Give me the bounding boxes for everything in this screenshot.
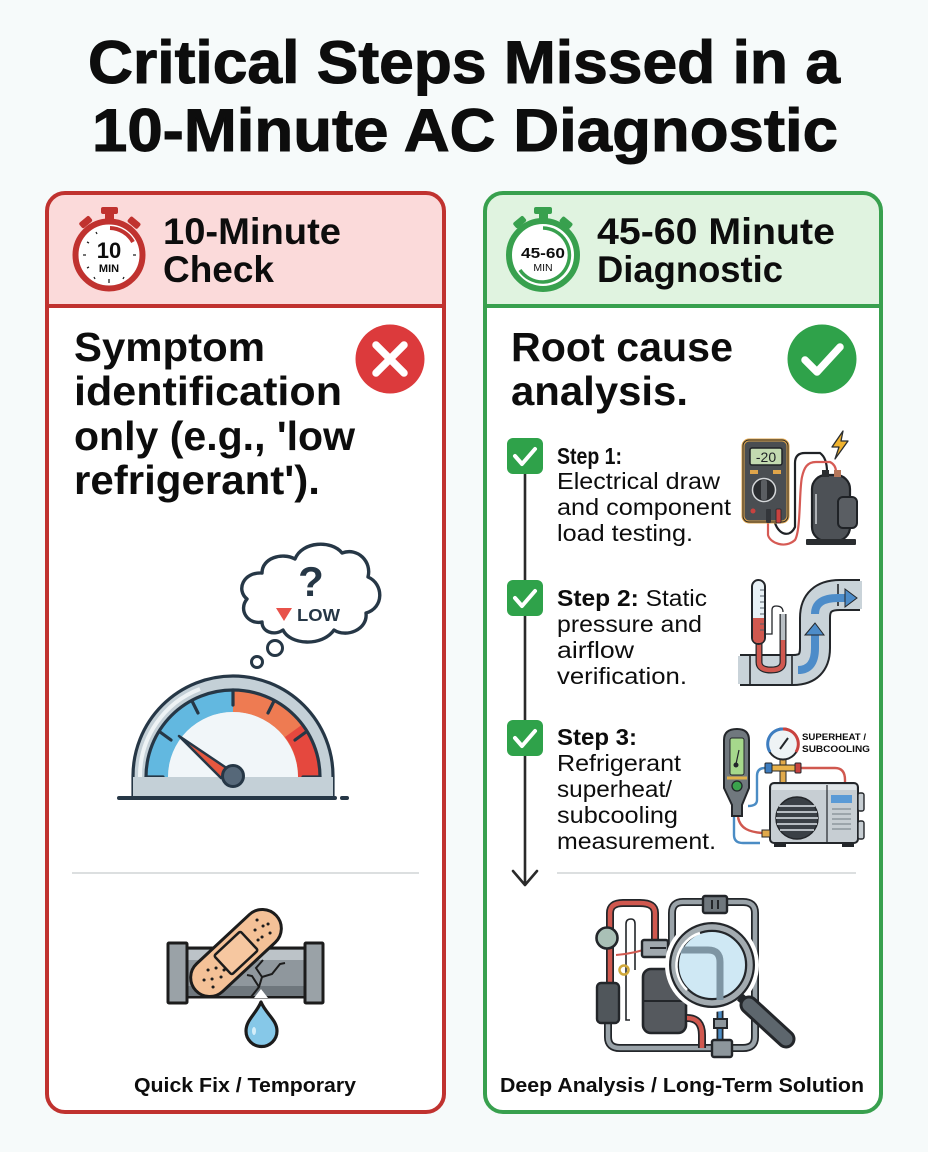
step 1 text	[557, 443, 731, 546]
step 1 text: Step 1:	[557, 443, 622, 469]
heading: 45-60 minute diagnostic	[597, 211, 835, 290]
icon: multimeter and compressor: -20	[756, 449, 776, 465]
step 1 text: load testing.	[557, 520, 693, 546]
step 3 text: superheat/	[557, 776, 672, 802]
step 2 text: pressure and	[557, 611, 702, 637]
heading: 10-minute check	[163, 211, 341, 290]
text: symptom identification: identification	[74, 368, 342, 414]
step 2 text: verification.	[557, 663, 687, 689]
icon: red x badge	[356, 324, 424, 394]
icon: pressure gauge	[119, 676, 347, 798]
step 2 text	[557, 585, 707, 689]
text: symptom identification: only (e.g., 'low	[74, 413, 355, 459]
text: symptom identification: refrigerant').	[74, 457, 320, 503]
heading: 10-minute check: Check	[163, 249, 274, 290]
icon: manometer and duct	[738, 580, 862, 685]
step 3 text	[557, 724, 716, 854]
timeline arrow	[513, 474, 537, 885]
text: root cause analysis	[511, 324, 733, 414]
step 2 text: airflow	[557, 637, 635, 663]
title	[88, 29, 841, 164]
step 3 text: subcooling	[557, 802, 678, 828]
icon: red stopwatch	[76, 207, 142, 288]
icon: green check badge	[788, 324, 856, 394]
heading: 45-60 minute diagnostic: 45-60 Minute	[597, 211, 835, 252]
step 3 check	[507, 720, 543, 756]
step 3 text: measurement.	[557, 828, 716, 854]
icon: red stopwatch: MIN	[99, 263, 119, 275]
icon: magnifier over AC system	[596, 896, 786, 1057]
icon: thought cloud	[242, 544, 380, 668]
icon: thought cloud: ?	[298, 558, 324, 605]
icon: refrigerant gauges and outdoor unit	[724, 728, 870, 847]
text: root cause analysis: Root cause	[511, 324, 733, 370]
icon: refrigerant gauges and outdoor unit: SUPERHEAT /	[802, 732, 867, 742]
icon: refrigerant gauges and outdoor unit: SUBCOOLING	[802, 744, 870, 754]
icon: green stopwatch	[509, 207, 577, 289]
caption: deep analysis: Deep Analysis / Long-Term Solution	[500, 1075, 864, 1097]
icon: bandaged cracked pipe	[168, 902, 323, 1046]
title: 10-Minute AC Diagnostic	[92, 97, 838, 164]
icon: red stopwatch: 10	[97, 238, 121, 263]
text: root cause analysis: analysis.	[511, 368, 688, 414]
icon: green stopwatch: MIN	[533, 262, 553, 274]
step 3 text: Refrigerant	[557, 750, 682, 776]
panel: 10-minute check	[47, 193, 444, 1112]
panel: 45-60 minute diagnostic	[485, 193, 881, 1112]
icon: green stopwatch: 45-60	[521, 245, 565, 262]
heading: 10-minute check: 10-Minute	[163, 211, 341, 252]
step 1 text: Electrical draw	[557, 468, 721, 494]
step 3 text: Step 3:	[557, 724, 637, 750]
caption: quick fix: Quick Fix / Temporary	[134, 1075, 357, 1097]
text: symptom identification: Symptom	[74, 324, 265, 370]
heading: 45-60 minute diagnostic: Diagnostic	[597, 249, 783, 290]
step 2 text: Step 2: Static	[557, 585, 707, 611]
text: symptom identification	[74, 324, 355, 503]
icon: thought cloud: LOW	[297, 605, 340, 625]
title: Critical Steps Missed in a	[88, 29, 841, 96]
step 2 check	[507, 580, 543, 616]
step 1 check	[507, 438, 543, 474]
step 1 text: and component	[557, 494, 731, 520]
icon: multimeter and compressor	[743, 431, 857, 545]
